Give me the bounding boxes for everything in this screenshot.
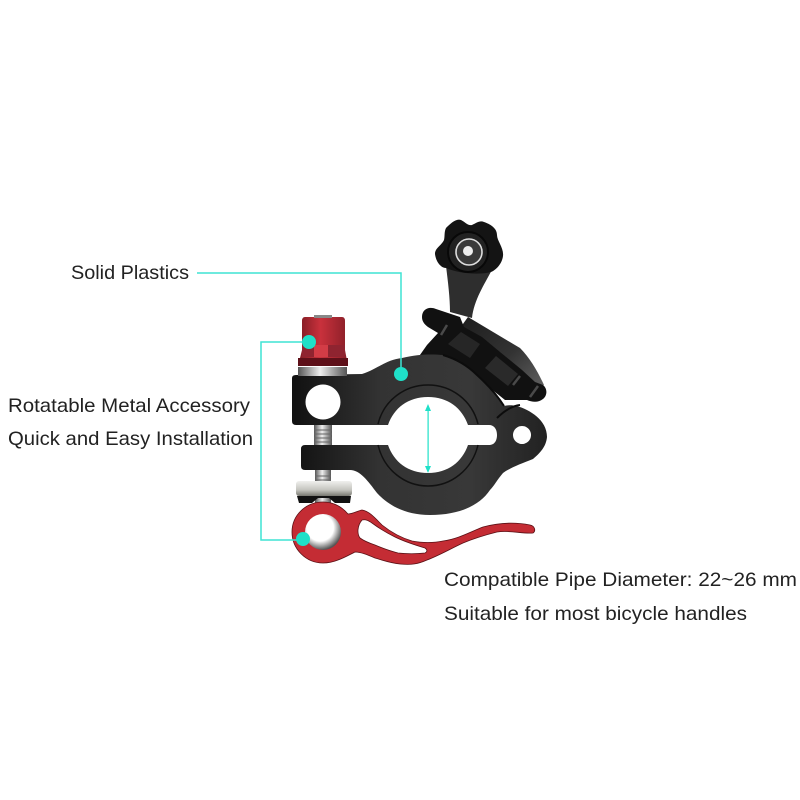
clamp product illustration <box>292 220 547 564</box>
icon: red quick-release lever <box>292 502 535 564</box>
text block: pipe diameter <box>444 569 797 625</box>
text block: pipe diameter: Suitable for most bicycle handles <box>444 603 747 625</box>
callout: solid plastics: Solid Plastics <box>71 262 189 284</box>
callout: rotatable metal accessory: Rotatable Metal Accessory <box>8 395 250 417</box>
icon: silver washer <box>296 481 352 503</box>
icon: threaded screw <box>314 420 332 510</box>
icon: pipe diameter arrow <box>425 404 431 473</box>
text block: pipe diameter: Compatible Pipe Diameter: 22~26 mm <box>444 569 797 591</box>
icon: rotating dial <box>415 308 546 402</box>
icon: upright thumb knob <box>435 220 503 318</box>
dial shadow on body <box>443 355 504 406</box>
callout: rotatable metal accessory: Quick and Easy Installation <box>8 428 253 450</box>
inner ring of clamp <box>378 385 478 486</box>
callout: solid plastics <box>71 262 408 381</box>
icon: clamp body <box>292 354 547 515</box>
hinge lobe edge <box>497 405 520 418</box>
icon: red metal nut <box>298 315 348 376</box>
callout: rotatable metal accessory <box>8 335 316 546</box>
icon: chrome bolt in lever <box>305 514 341 550</box>
